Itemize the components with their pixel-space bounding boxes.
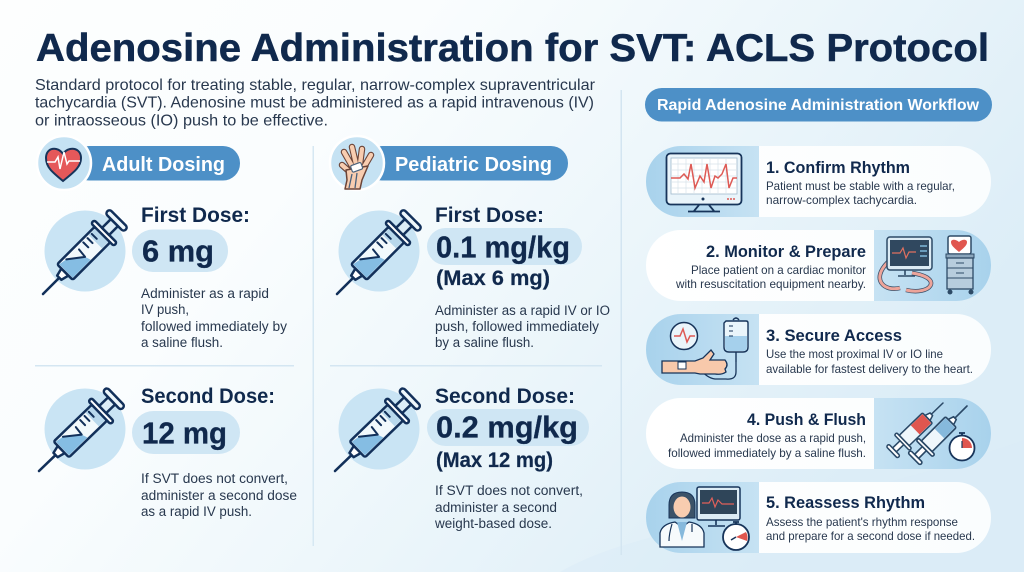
dose value: 6 mg [142,234,214,268]
workflow heading [645,88,992,122]
step 1 text: narrow-complex tachycardia. [766,193,917,207]
description: administer a second dose [141,488,297,503]
icon: syringe [326,207,424,305]
step 5 text: Assess the patient's rhythm response [766,515,958,529]
dose value: (Max 12 mg) [436,449,553,472]
panel: workflow [645,88,992,553]
step 3 text: available for fastest delivery to the heart. [766,362,973,376]
step 2 text: 2. Monitor & Prepare [706,242,866,261]
icon: clinician, monitor and stopwatch [660,487,749,550]
icon: monitor and crash cart [880,236,974,294]
description: administer a second [435,500,557,515]
icon: syringes and stopwatch [884,395,975,467]
step 5 text [766,493,975,543]
icon: ECG monitor [666,154,742,212]
step 5 text: 5. Reassess Rhythm [766,493,925,512]
dose value [132,411,240,454]
pediatric first dose: First Dose: [435,204,544,227]
description: If SVT does not convert, [435,483,583,498]
dose value [132,230,228,272]
step 1 text [766,158,955,207]
intro text [35,77,596,130]
description: Administer as a rapid IV or IO [435,303,610,318]
icon: IV access on arm [662,318,748,379]
step 4 text: followed immediately by a saline flush. [668,446,866,460]
step 2 [646,230,991,301]
description: push, followed immediately [435,319,599,334]
description: Administer as a rapid [141,286,269,301]
pediatric second dose: Second Dose: [435,385,575,408]
description [434,483,583,531]
icon: syringe [324,385,423,483]
icon: syringe [32,207,130,305]
icon: syringe [28,385,127,483]
pediatric heading pill: Pediatric Dosing [395,154,552,176]
step 4 text: Administer the dose as a rapid push, [680,431,866,445]
step 1 text: 1. Confirm Rhythm [766,158,910,177]
adult first dose [32,204,287,350]
description [435,303,610,350]
description: IV push, [141,302,189,317]
dose value: 12 mg [142,416,227,450]
step 3 text: 3. Secure Access [766,326,902,345]
step 4 text [668,410,866,460]
description: followed immediately by [141,319,287,334]
step 4 text: 4. Push & Flush [747,410,866,429]
step 5 text: and prepare for a second dose if needed. [766,529,975,543]
step 5 [646,482,991,553]
icon: heart [37,136,91,190]
pediatric second dose [324,385,589,531]
panel: pediatric dosing [324,136,610,531]
adult second dose [28,385,297,519]
description [141,471,297,519]
step 2 text: Place patient on a cardiac monitor [691,263,866,277]
description: If SVT does not convert, [141,471,288,486]
icon: child hand [330,136,384,190]
step 3 [646,314,991,385]
step 3 text: Use the most proximal IV or IO line [766,347,943,361]
adult heading pill [72,146,240,180]
pediatric first dose [326,204,610,350]
workflow heading: Rapid Adenosine Administration Workflow [657,97,980,114]
intro text: tachycardia (SVT). Adenosine must be administered as a rapid intravenous (IV) [35,94,594,112]
step 3 text [766,326,973,376]
description [141,286,287,350]
step 1 [646,146,991,217]
step 2 text: with resuscitation equipment nearby. [675,277,866,291]
title: Adenosine Administration for SVT: ACLS Protocol [36,27,989,70]
dose value: 0.2 mg/kg [436,410,578,444]
dose value [427,409,589,472]
step 4 [646,395,991,469]
adult first dose: First Dose: [141,204,250,227]
step 1 text: Patient must be stable with a regular, [766,179,955,193]
intro text: or intraosseous (IO) push to be effective. [35,112,328,130]
dose value: (Max 6 mg) [436,267,550,290]
step 2 text [675,242,866,291]
adult second dose: Second Dose: [141,385,275,408]
description: by a saline flush. [435,335,534,350]
adult heading pill: Adult Dosing [102,154,225,176]
panel: adult dosing [28,136,297,519]
description: weight-based dose. [434,516,552,531]
description: as a rapid IV push. [141,504,252,519]
intro text: Standard protocol for treating stable, regular, narrow-complex supraventricular [35,77,596,94]
dose value: 0.1 mg/kg [436,230,570,264]
description: a saline flush. [141,335,223,350]
pediatric heading pill [365,146,568,180]
dose value [427,228,582,290]
